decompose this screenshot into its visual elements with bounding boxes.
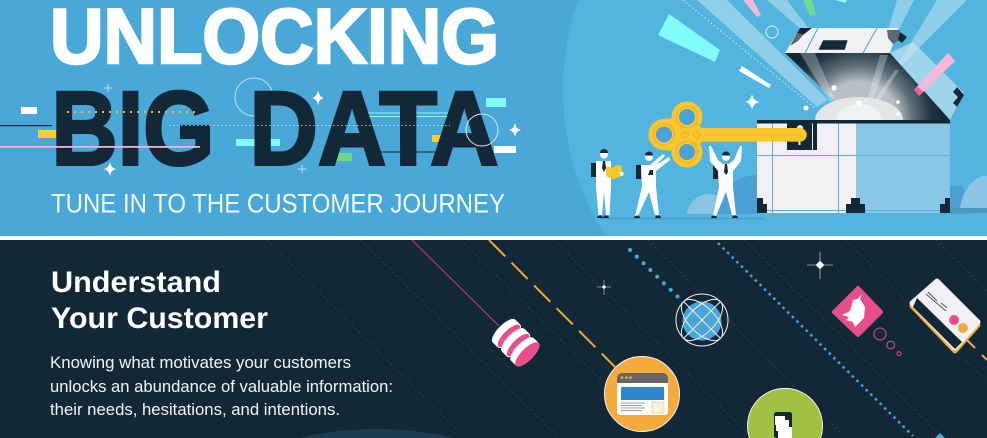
shard: pink (743, 0, 761, 17)
light rays (697, 0, 967, 107)
chest lid interior (785, 53, 950, 120)
dotted ray line (683, 0, 815, 108)
small blue dotted line (718, 243, 913, 436)
shard: cyan small (835, 0, 847, 3)
icon: twitter diamond (834, 288, 881, 335)
shard: green (803, 0, 816, 16)
lock plate (787, 123, 817, 150)
body text: their needs, hesitations, and intentions. (50, 400, 340, 419)
icon: globe (674, 292, 730, 348)
chest rim (757, 120, 950, 124)
lid top (785, 28, 898, 53)
lid corners and latch (790, 28, 907, 53)
key (648, 102, 807, 168)
dome glow (815, 97, 903, 120)
icon: credit card (912, 281, 978, 351)
heading: Your Customer (51, 302, 268, 335)
lid side corner (953, 87, 964, 107)
chest feet (757, 198, 950, 213)
sparkle small (597, 280, 611, 295)
person lifting key, right (709, 146, 742, 218)
body text: unlocks an abundance of valuable information: (50, 377, 393, 396)
ring (766, 26, 778, 38)
chest body left (757, 123, 856, 213)
chest body right (856, 123, 950, 213)
orange dashed line (489, 240, 615, 367)
sparkle large (807, 252, 833, 279)
sparkles around title (104, 84, 521, 176)
pink line (412, 240, 499, 326)
panel: understand your customer (0, 240, 987, 438)
diamond bottom (935, 433, 945, 438)
teal hill (300, 429, 455, 438)
shard: white (739, 66, 771, 88)
lid translucent side (890, 42, 964, 120)
bubbles (874, 328, 901, 356)
title: Big Data: BIG (52, 70, 214, 188)
large blue dots (630, 250, 678, 297)
sparkle (745, 94, 760, 110)
panel: hero banner (0, 0, 987, 236)
tagline: TUNE IN TO THE CUSTOMER JOURNEY (51, 188, 505, 218)
icon: browser window (604, 356, 680, 432)
orange line right (967, 340, 987, 360)
faint dotted diagonals (267, 240, 987, 438)
chest straps (757, 123, 950, 213)
white divider (0, 236, 987, 240)
person reading map (591, 149, 624, 218)
person lifting key, left (634, 152, 670, 218)
ground mounds (600, 175, 987, 219)
chest (757, 28, 964, 213)
lid inner beams (800, 53, 899, 102)
icon: green circle with phone (748, 388, 823, 438)
icon: database (488, 315, 543, 370)
shard: cyan (658, 14, 720, 62)
decoration behind title (0, 78, 516, 161)
body text: Knowing what motivates your customers (50, 353, 351, 372)
pink bar (914, 53, 955, 95)
floating sparks (804, 85, 900, 116)
heading: Understand (51, 266, 221, 299)
title: Big Data: DATA (250, 70, 498, 188)
lines over title (0, 112, 498, 148)
